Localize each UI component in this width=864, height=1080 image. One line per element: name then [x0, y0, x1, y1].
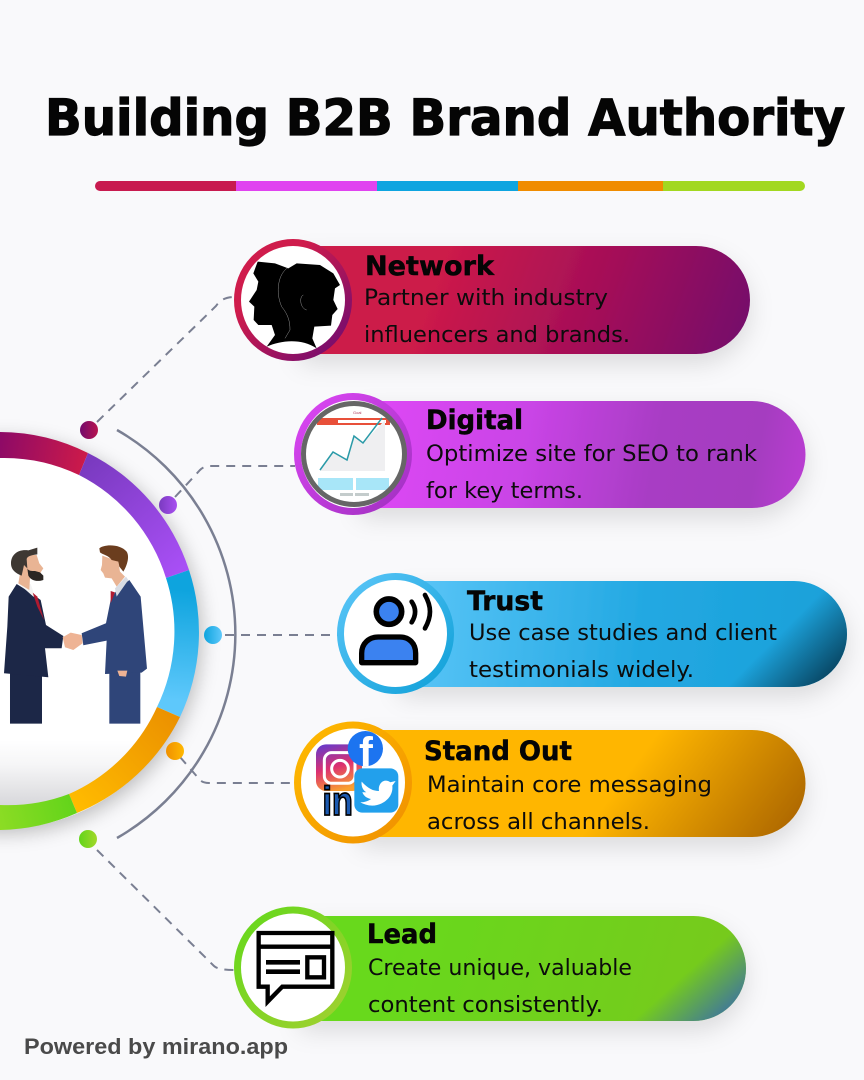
dot: lead: [79, 830, 97, 848]
ring segment: green: [0, 794, 77, 830]
rainbow title divider: [95, 181, 805, 191]
digital heading: Digital: [426, 405, 523, 436]
lead body text: Create unique, valuable: [368, 956, 632, 981]
icon: speaking person: [362, 595, 430, 663]
network body text: Partner with industry: [364, 286, 608, 311]
trust badge: [340, 576, 450, 690]
trust body text: testimonials widely.: [469, 658, 694, 683]
digital badge: [298, 396, 408, 512]
lead badge: [238, 910, 348, 1025]
stand out pill: [360, 730, 805, 837]
trust heading: Trust: [467, 586, 543, 617]
digital body text: Optimize site for SEO to rank: [426, 442, 757, 467]
lead heading: Lead: [367, 919, 437, 950]
lead pill: [300, 916, 746, 1021]
dashed connector lines: [97, 297, 338, 970]
stand out body text: across all channels.: [427, 810, 650, 835]
dot: digital: [159, 496, 177, 514]
connector dots: [79, 421, 222, 848]
ring segment: crimson: [0, 432, 88, 475]
central hub: [0, 432, 199, 830]
ring segment: orange: [69, 707, 180, 813]
trust pill: [400, 581, 847, 687]
panel: lead: [238, 910, 746, 1025]
icon: social media logos: in: [322, 778, 353, 824]
stand out badge: [298, 725, 408, 840]
panel: network: [238, 242, 750, 358]
title: Building B2B Brand Authority: [45, 89, 845, 147]
stand out body text: Maintain core messaging: [427, 773, 712, 798]
digital body text: for key terms.: [426, 479, 583, 504]
left head: [11, 548, 43, 590]
icon: analytics chart: [304, 404, 404, 504]
dot: network: [80, 421, 98, 439]
ring segment: purple: [79, 453, 189, 578]
handshake illustration: [4, 545, 147, 724]
hub shadow disc: [0, 433, 198, 829]
panel: stand out: [298, 725, 805, 840]
lead body text: content consistently.: [368, 993, 603, 1018]
network heading: Network: [365, 251, 495, 282]
dot: trust: [204, 626, 222, 644]
panel: trust: [340, 576, 847, 690]
icon: social media logos: [316, 728, 398, 824]
icon: content speech bubble: [259, 933, 332, 1002]
network pill: [300, 246, 750, 354]
icon: two head silhouettes: [249, 262, 340, 348]
trust body text: Use case studies and client: [469, 621, 777, 646]
icon: social media logos: f: [359, 728, 373, 775]
icon: analytics chart: Goal: [353, 410, 362, 415]
right head: [99, 545, 128, 587]
dot: stand out: [166, 742, 184, 760]
panel: digital: [298, 396, 805, 512]
ring segment: blue: [157, 570, 199, 717]
network badge: [238, 242, 348, 358]
hub white disc: [0, 446, 185, 816]
stand out heading: Stand Out: [424, 736, 572, 767]
network body text: influencers and brands.: [364, 323, 630, 348]
outer thin arc: [117, 430, 235, 838]
digital pill: [360, 401, 805, 508]
footer credit: Powered by mirano.app: [24, 1034, 288, 1059]
